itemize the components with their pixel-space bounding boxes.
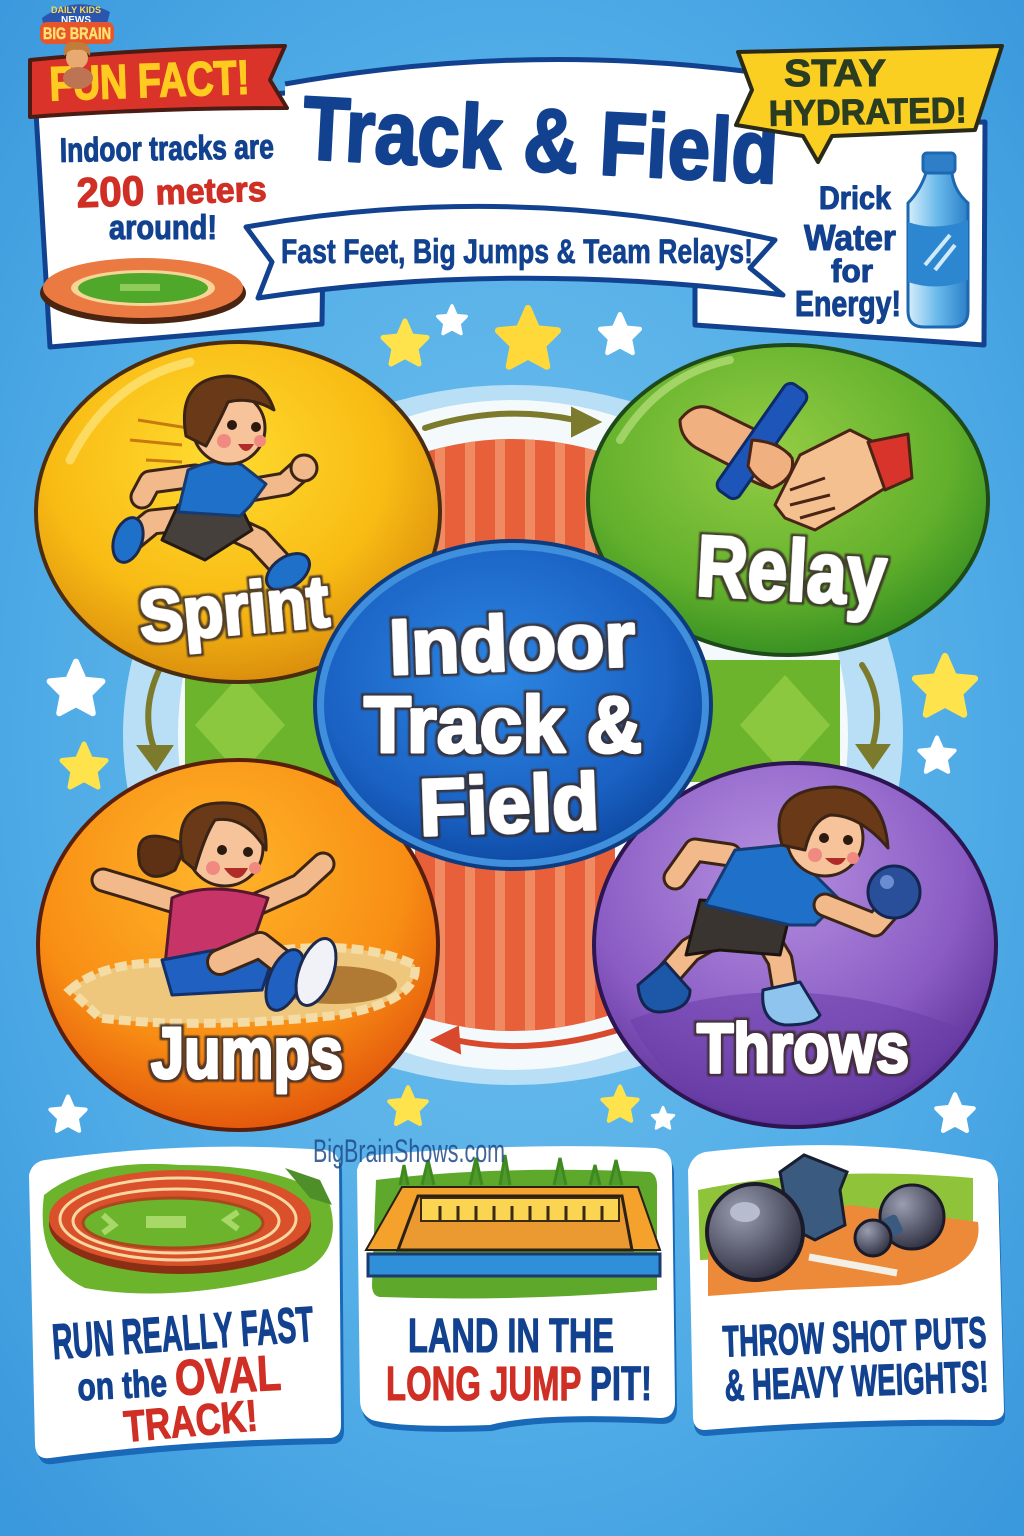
circle: relay bbox=[588, 345, 988, 655]
card text: oval track bbox=[50, 1296, 315, 1452]
fun fact text bbox=[59, 128, 274, 247]
title banner bbox=[285, 60, 800, 240]
center circle: indoor track and field: Field bbox=[418, 757, 601, 852]
fun fact ribbon: FUN FACT! bbox=[49, 52, 250, 111]
label: jumps: Jumps bbox=[151, 1014, 343, 1094]
logo: daily kids news big brain: NEWS bbox=[61, 15, 91, 26]
sand pit bbox=[70, 948, 415, 1023]
track background behind circles bbox=[123, 385, 903, 1085]
image: oval track bbox=[43, 1164, 333, 1294]
speech bubble: stay hydrated bbox=[736, 46, 1002, 162]
panel: stay hydrated box bbox=[695, 122, 985, 345]
label: throws: Throws bbox=[697, 1009, 909, 1087]
logo: daily kids news big brain: DAILY KIDS bbox=[51, 5, 101, 15]
card text: jump pit: LONG JUMP PIT! bbox=[386, 1358, 652, 1411]
circle: jumps bbox=[38, 760, 438, 1130]
card: shot puts bbox=[688, 1145, 1005, 1436]
fun fact text: Indoor tracks are bbox=[59, 128, 274, 170]
label: sprint: Sprint bbox=[136, 562, 332, 658]
label: relay: Relay bbox=[694, 518, 889, 624]
subtitle ribbon bbox=[246, 206, 783, 298]
logo: daily kids news big brain: BIG BRAIN bbox=[43, 24, 111, 43]
hydrated text: Energy! bbox=[795, 283, 901, 324]
speed lines bbox=[130, 420, 188, 462]
card text: jump pit: LAND IN THE bbox=[408, 1310, 614, 1363]
speech bubble: stay hydrated: HYDRATED! bbox=[768, 89, 967, 134]
speech bubble: stay hydrated: STAY bbox=[784, 53, 886, 95]
panel: fun fact box bbox=[36, 90, 325, 347]
hydrated text: for bbox=[831, 253, 873, 289]
hydrated text: Water bbox=[804, 217, 896, 258]
website watermark: BigBrainShows.com bbox=[313, 1133, 505, 1169]
center circle: indoor track and field bbox=[315, 541, 711, 869]
fun fact track icon bbox=[40, 258, 246, 324]
hydrated content bbox=[795, 153, 968, 327]
center circle: indoor track and field: Indoor bbox=[388, 595, 637, 691]
card: long jump pit bbox=[357, 1146, 677, 1432]
sprint kid bbox=[108, 376, 317, 598]
fun fact content bbox=[40, 128, 274, 324]
cycle arrows bbox=[138, 408, 889, 1053]
card text: oval track: TRACK! bbox=[122, 1391, 260, 1452]
image: jump pit bbox=[366, 1155, 660, 1298]
fun fact text: 200 meters bbox=[76, 163, 267, 216]
card: oval track bbox=[29, 1147, 344, 1464]
card text: shot puts bbox=[722, 1308, 989, 1411]
image: shot puts bbox=[698, 1155, 979, 1296]
logo: daily kids news big brain bbox=[40, 4, 114, 89]
card text: oval track: RUN REALLY FAST bbox=[50, 1296, 315, 1370]
relay hands and baton bbox=[680, 380, 912, 530]
mascot bbox=[63, 42, 93, 89]
card text: jump pit bbox=[386, 1310, 652, 1411]
throws kid bbox=[638, 787, 920, 1025]
fun fact text: around! bbox=[109, 209, 217, 247]
subtitle ribbon: Fast Feet, Big Jumps & Team Relays! bbox=[281, 233, 753, 271]
icon: water bottle bbox=[908, 153, 968, 327]
center circle: indoor track and field: Track & bbox=[364, 680, 642, 769]
decorative stars bbox=[50, 306, 975, 1131]
circle: sprint bbox=[36, 342, 440, 682]
hydrated text bbox=[795, 180, 901, 324]
circle: throws bbox=[594, 763, 996, 1127]
title: Track & Field bbox=[300, 79, 781, 203]
card text: oval track: on the OVAL bbox=[76, 1345, 282, 1411]
hydrated text: Drick bbox=[819, 180, 891, 216]
jumps kid bbox=[103, 803, 344, 1016]
